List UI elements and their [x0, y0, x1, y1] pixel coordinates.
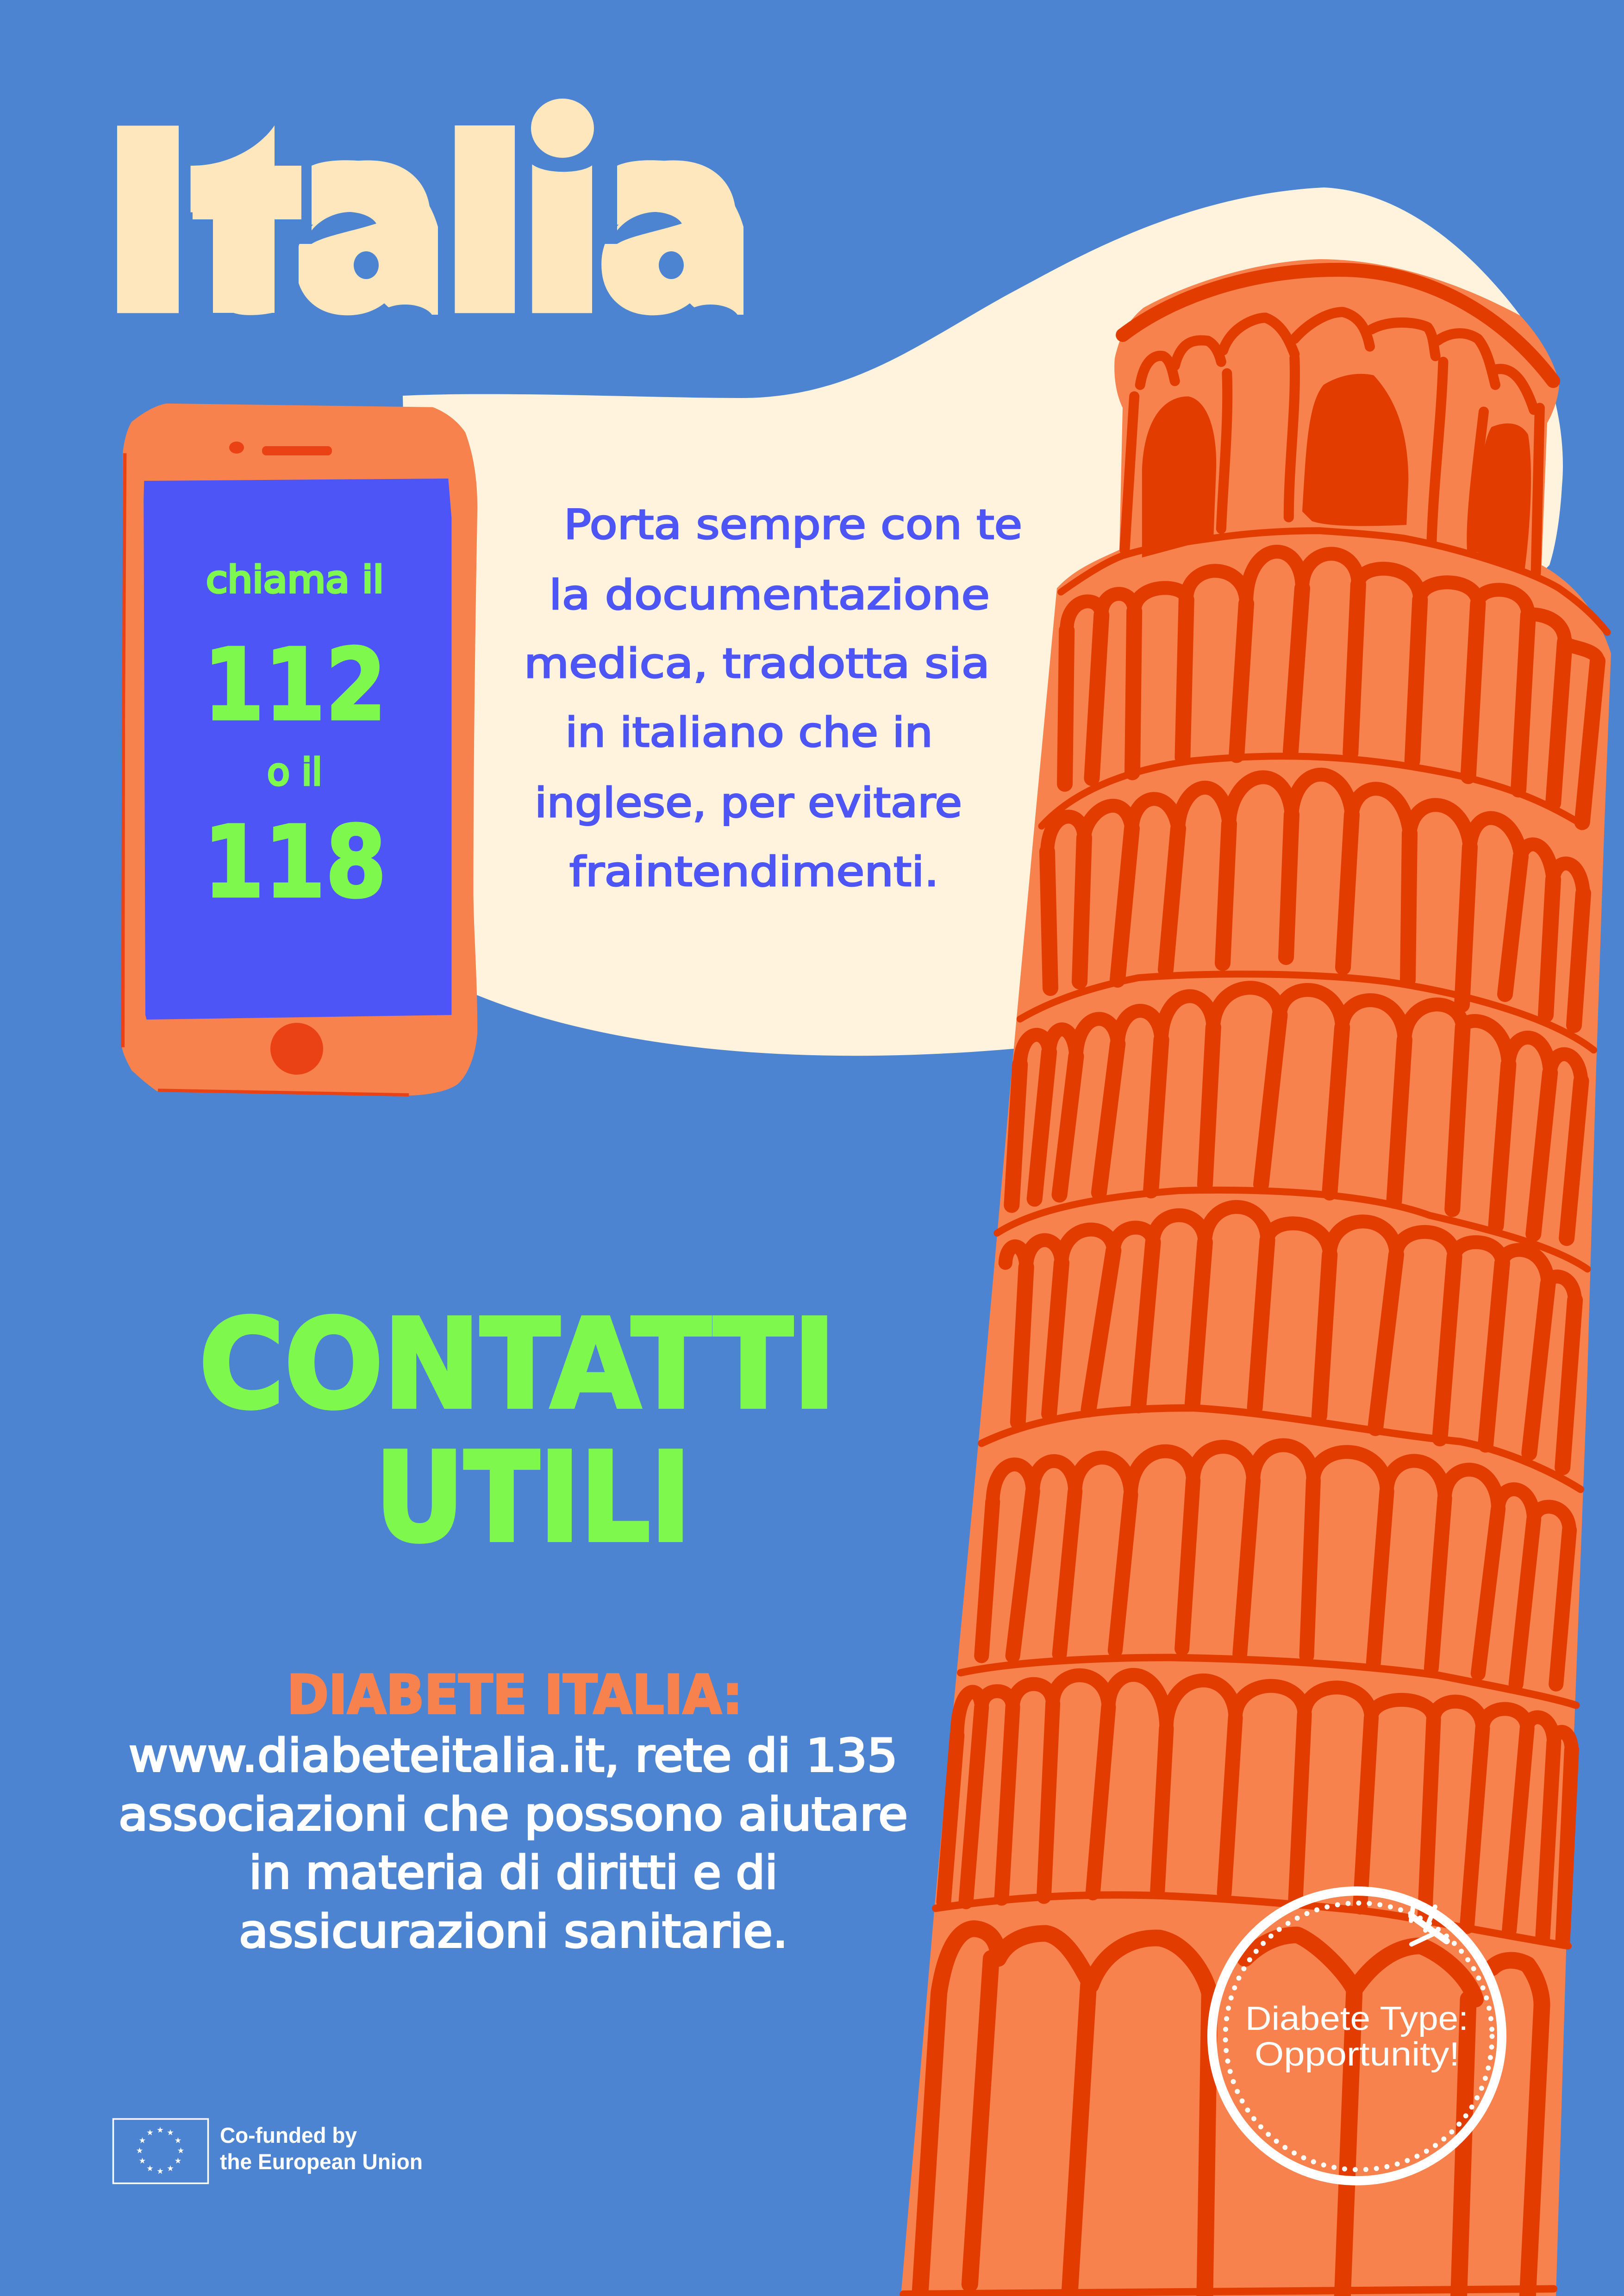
title text: Italia — [116, 89, 739, 348]
phone text: o il: o il — [267, 751, 322, 794]
EU text — [220, 2123, 423, 2174]
tower silhouette — [901, 259, 1611, 2296]
phone — [121, 404, 477, 1096]
phone edge shading — [121, 453, 409, 1096]
EU stars — [137, 2127, 184, 2174]
heading: contatti utili: UTILI — [375, 1426, 691, 1569]
body text: documentation advice: in italiano che in — [565, 709, 933, 756]
heading: contatti utili: CONTATTI — [199, 1293, 836, 1436]
base arcade — [903, 1895, 1568, 2296]
title lower counter first a — [354, 251, 379, 279]
body text: documentation advice: la documentazione — [549, 571, 990, 619]
title trimming — [187, 93, 767, 324]
title — [116, 89, 767, 348]
title wave notch second a — [682, 305, 739, 336]
title wave notch first a — [376, 305, 434, 336]
phone text: chiama il: chiama il — [206, 558, 384, 601]
EU flag box — [113, 2119, 208, 2184]
contact text: www.diabeteitalia.it, rete di 135 — [129, 1730, 898, 1782]
body text: documentation advice — [524, 501, 1022, 896]
title counters — [312, 212, 682, 244]
phone body — [122, 404, 477, 1095]
second arcade — [1047, 775, 1583, 1025]
contact text: in materia di diritti e di — [249, 1847, 778, 1899]
badge text: Diabete Type: — [1245, 2000, 1468, 2037]
phone speaker — [262, 446, 332, 455]
contact text: assicurazioni sanitarie. — [239, 1905, 788, 1958]
heading: contatti utili — [199, 1293, 836, 1569]
EU co-funding logo — [113, 2119, 423, 2184]
badge outer ring — [1212, 1891, 1502, 2181]
phone number 112: 112 — [203, 628, 387, 743]
badge: diabete type opportunity — [1212, 1891, 1502, 2181]
body text: documentation advice: inglese, per evitare — [535, 779, 962, 827]
contact text — [119, 1730, 908, 1958]
cream wave panel — [403, 187, 1563, 1056]
badge plane icon — [1411, 1907, 1447, 1944]
contact text: associazioni che possono aiutare — [119, 1788, 908, 1841]
heading: diabete italia: DIABETE ITALIA: — [287, 1664, 743, 1726]
badge dotted ring — [1225, 1903, 1492, 2170]
tower of Pisa — [901, 259, 1611, 2296]
body text: documentation advice: fraintendimenti. — [569, 848, 939, 896]
title i dot — [531, 99, 594, 158]
EU text: Co-funded by — [220, 2123, 357, 2147]
phone home button — [270, 1023, 323, 1075]
title lower counter second a — [659, 251, 684, 279]
phone camera — [229, 442, 244, 454]
phone number 118: 118 — [203, 805, 387, 920]
body text: documentation advice: medica, tradotta sia — [524, 640, 990, 687]
body text: documentation advice: Porta sempre con te — [564, 501, 1022, 548]
phone screen — [144, 479, 451, 1020]
EU text: the European Union — [220, 2149, 423, 2174]
belfry and first arcade — [1042, 270, 1607, 826]
third and fourth arcades — [997, 974, 1594, 1468]
title letter fill — [193, 125, 743, 315]
fifth and sixth arcades — [943, 1408, 1580, 1941]
badge: diabete type opportunity: Opportunity! — [1255, 2036, 1460, 2073]
